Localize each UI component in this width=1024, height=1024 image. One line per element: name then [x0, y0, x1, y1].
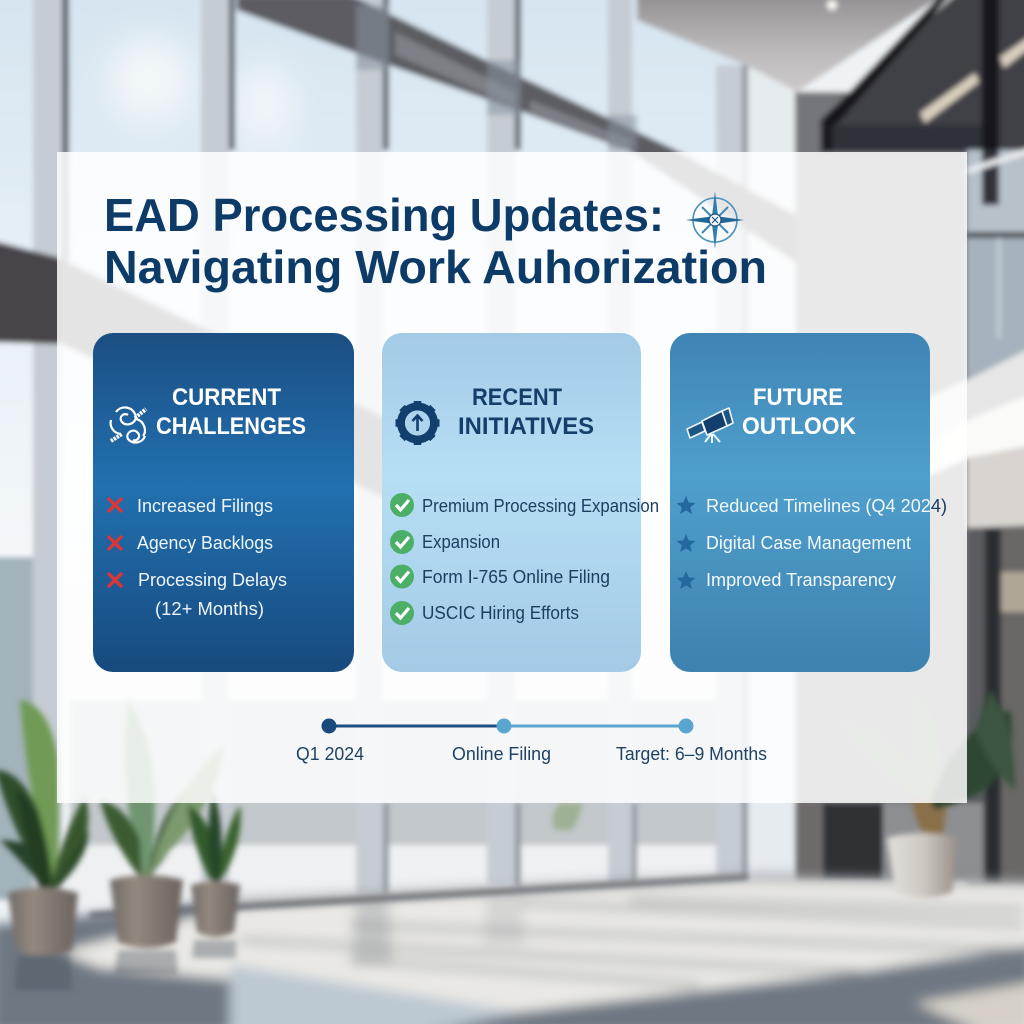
list: challenges: Agency Backlogs [137, 533, 273, 553]
list: outlook: Digital Case Management [706, 533, 911, 553]
list: initiatives [390, 493, 659, 625]
list: initiatives: Form I-765 Online Filing [422, 567, 610, 587]
plant: right [840, 690, 1015, 898]
panel: future outlook [670, 333, 947, 672]
list: outlook: Reduced Timelines (Q4 2024) [706, 496, 947, 516]
icon: gear with up arrow [396, 401, 440, 445]
timeline: Q1 2024 [296, 744, 364, 764]
icon: compass [686, 191, 744, 249]
title: Navigating Work Auhorization [104, 241, 767, 293]
list: outlook: Improved Transparency [706, 570, 896, 590]
plant: centre [188, 790, 241, 958]
title: EAD Processing Updates: [104, 189, 664, 241]
heading: OUTLOOK [742, 413, 857, 440]
heading: RECENT [472, 384, 562, 411]
floor [0, 875, 1024, 1024]
list: challenges: (12+ Months) [155, 599, 264, 619]
heading [742, 384, 857, 440]
heading [458, 384, 594, 440]
plant: left [0, 700, 88, 990]
heading: FUTURE [753, 384, 843, 411]
list: initiatives: Expansion [422, 532, 500, 552]
heading: INITIATIVES [458, 413, 594, 440]
list: outlook [676, 496, 947, 590]
plant: centre left [100, 700, 225, 975]
plant: distant [552, 803, 582, 830]
heading [156, 384, 306, 440]
icon: telescope [687, 408, 733, 443]
heading: CHALLENGES [156, 413, 306, 440]
list: challenges: Increased Filings [137, 496, 273, 516]
window sill [90, 874, 748, 920]
list: initiatives: Premium Processing Expansion [422, 496, 659, 516]
panel: current challenges [93, 333, 354, 672]
title [104, 189, 767, 293]
timeline: Online Filing [452, 744, 551, 764]
heading: CURRENT [172, 384, 281, 411]
list: challenges: Processing Delays [138, 570, 287, 590]
timeline: Target: 6–9 Months [616, 744, 767, 764]
glass panel [57, 152, 967, 803]
panel: recent initiatives [382, 333, 659, 672]
icon: tangled chain [111, 407, 146, 443]
timeline [296, 718, 767, 764]
list: challenges [108, 496, 287, 619]
plants in pots [0, 690, 1015, 990]
list: initiatives: USCIC Hiring Efforts [422, 603, 579, 623]
